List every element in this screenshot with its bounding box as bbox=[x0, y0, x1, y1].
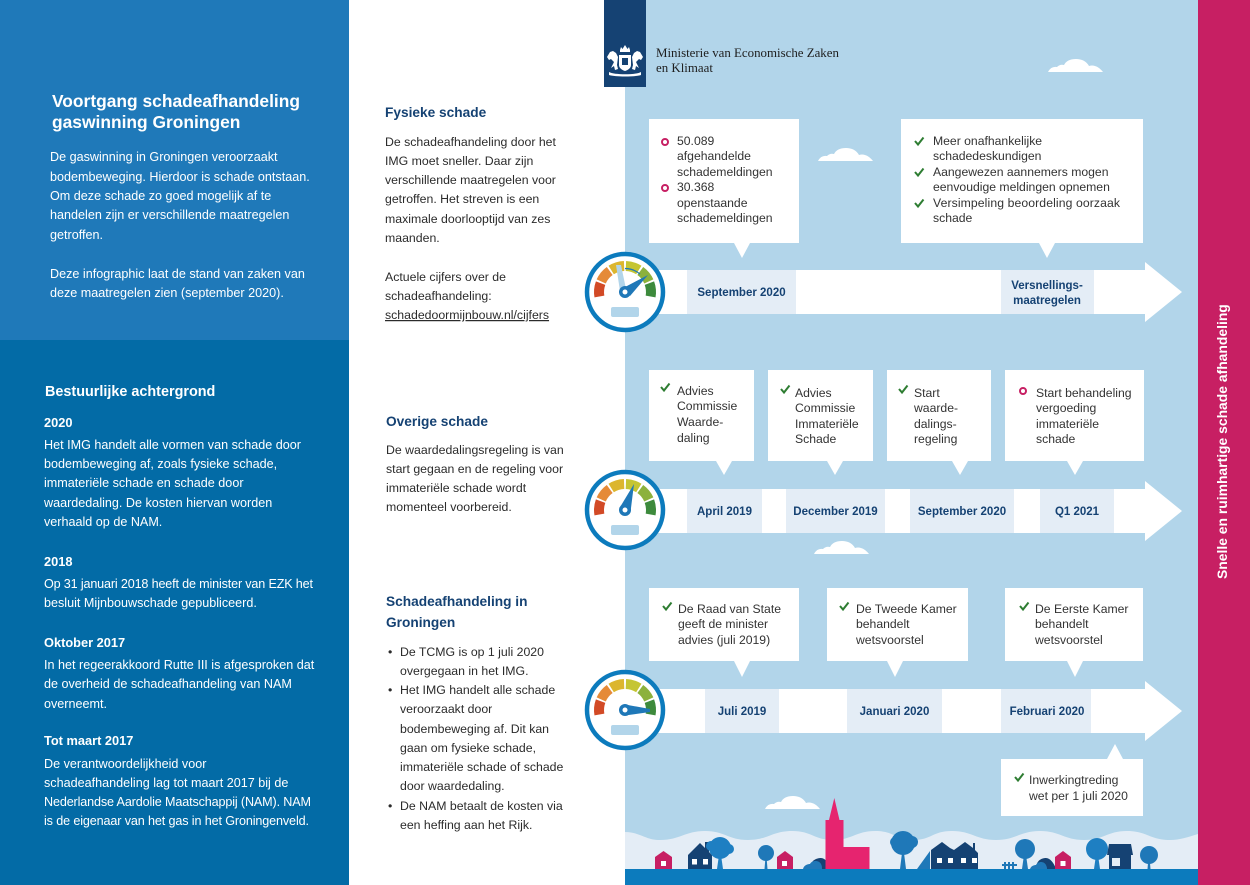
icon: bush bbox=[803, 858, 830, 869]
text block: oktober 2017 bbox=[44, 635, 315, 711]
date: september 2020: September 2020 bbox=[918, 506, 1006, 518]
icon: tree bbox=[758, 845, 774, 869]
text block: fysieke schade: getroffen. Het streven is een bbox=[385, 192, 539, 206]
callout: start waardedalingsregeling: waarde- bbox=[913, 401, 958, 415]
date: versnellingsmaatregelen: maatregelen bbox=[1013, 295, 1081, 307]
text block: fysieke schade: maanden. bbox=[385, 231, 440, 245]
callout: inwerkingtreding bbox=[1001, 744, 1143, 816]
callout: schademeldingen: schademeldingen bbox=[677, 211, 773, 225]
panel: timeline background bbox=[625, 0, 1198, 885]
heading: bestuurlijke achtergrond: Bestuurlijke achtergrond bbox=[45, 384, 215, 400]
text block: overige schade: momenteel voorbereid. bbox=[386, 500, 512, 514]
text block: schadeafhandeling in groningen: immateriële schade of schade bbox=[400, 760, 564, 774]
cloud bbox=[1048, 59, 1103, 72]
text block: schadeafhandeling in groningen: De TCMG is op 1 juli 2020 bbox=[400, 645, 544, 659]
text block: introduction: bodembeweging. Hierdoor is schade ontstaan. bbox=[50, 170, 310, 184]
icon: tree bbox=[1140, 846, 1158, 869]
text block: schadeafhandeling in groningen: veroorzaakt door bbox=[400, 702, 492, 716]
callout: schademeldingen: afgehandelde bbox=[677, 149, 751, 163]
date: q1 2021 bbox=[1040, 489, 1114, 533]
title bbox=[52, 91, 300, 132]
text: ministry name: Ministerie van Economische Zaken bbox=[656, 46, 839, 60]
callout: tweede kamer: wetsvoorstel bbox=[855, 633, 924, 647]
callout: advies commissie waardedaling: daling bbox=[677, 431, 710, 445]
date: januari 2020: Januari 2020 bbox=[860, 706, 929, 718]
callout: schademeldingen: 30.368 bbox=[677, 180, 714, 194]
callout: start waardedalingsregeling: dalings- bbox=[914, 417, 957, 431]
callout: advies commissie waardedaling: Commissie bbox=[677, 399, 737, 413]
callout: start behandeling vergoeding: Start behandeling bbox=[1036, 386, 1132, 400]
callout: start behandeling vergoeding: immateriële bbox=[1036, 417, 1099, 431]
text block: tot maart 2017: De verantwoordelijkheid voor bbox=[44, 757, 206, 771]
icon: ring bullet bbox=[662, 139, 668, 145]
text block: schadeafhandeling in groningen: door waardedaling. bbox=[400, 779, 505, 793]
text block: tot maart 2017: schadeafhandeling lag tot maart 2017 bij de bbox=[44, 776, 288, 790]
text block: schadeafhandeling in groningen: • bbox=[388, 799, 392, 813]
callout: versnellingsmaatregelen: Aangewezen aannemers mogen bbox=[933, 165, 1108, 179]
panel: side banner: Snelle en ruimhartige schade afhandeling bbox=[1214, 304, 1230, 579]
callout: start waardedalingsregeling: regeling bbox=[914, 432, 957, 446]
callout: versnellingsmaatregelen: schade bbox=[933, 211, 973, 225]
illustration: village landscape bbox=[625, 798, 1198, 885]
text block: schadeafhandeling in groningen: een heffing aan het Rijk. bbox=[400, 818, 532, 832]
callout: tweede kamer: De Tweede Kamer bbox=[856, 602, 957, 616]
callout: eerste kamer: wetsvoorstel bbox=[1034, 633, 1103, 647]
text block: fysieke schade bbox=[385, 105, 557, 322]
text block: overige schade: start gegaan en de regeling voor bbox=[386, 462, 563, 476]
callout: start waardedalingsregeling bbox=[887, 370, 991, 475]
text block: schadeafhandeling in groningen: • bbox=[388, 683, 392, 697]
callout: start behandeling vergoeding: schade bbox=[1036, 432, 1076, 446]
callout: advies commissie immateriele schade: Schade bbox=[795, 432, 837, 446]
gauge: schadeafhandeling in groningen bbox=[587, 672, 663, 748]
text block: 2020: waardedaling. De kosten hiervan worden bbox=[43, 496, 272, 510]
text block: fysieke schade: De schadeafhandeling door het bbox=[385, 135, 557, 149]
icon: tree bbox=[890, 831, 918, 869]
callout: schademeldingen: 50.089 bbox=[677, 134, 714, 148]
callout: eerste kamer bbox=[1005, 588, 1143, 677]
text block: overige schade: De waardedalingsregeling is van bbox=[386, 443, 564, 457]
callout: schademeldingen: schademeldingen bbox=[677, 165, 773, 179]
text block: oktober 2017: Oktober 2017 bbox=[44, 635, 125, 650]
callout: start behandeling vergoeding bbox=[1005, 370, 1144, 475]
text block: schadeafhandeling in groningen: bodembeweging af. Dit kan bbox=[400, 722, 549, 736]
text block: fysieke schade: schadeafhandeling: bbox=[385, 289, 492, 303]
text block: introduction: Deze infographic laat de stand van zaken van bbox=[50, 267, 305, 281]
text block: fysieke schade: IMG moet sneller. Daar zijn bbox=[385, 154, 533, 168]
text block: 2018: Op 31 januari 2018 heeft de minister van EZK het bbox=[44, 577, 314, 591]
callout: raad van state: geeft de minister bbox=[678, 617, 768, 631]
date: december 2019: December 2019 bbox=[793, 506, 878, 518]
date: juli 2019: Juli 2019 bbox=[718, 706, 766, 718]
gauge: fysieke schade bbox=[587, 254, 663, 330]
text block: 2020: verhaald op de NAM. bbox=[44, 515, 162, 529]
callout: eerste kamer: De Eerste Kamer bbox=[1035, 602, 1128, 616]
callout: raad van state: advies (juli 2019) bbox=[678, 633, 770, 647]
text block: schadeafhandeling in groningen: gaan om fysieke schade, bbox=[400, 741, 536, 755]
callout: raad van state: De Raad van State bbox=[678, 602, 781, 616]
icon: ring bullet bbox=[1020, 388, 1026, 394]
text block: schadeafhandeling in groningen: Schadeafhandeling in bbox=[386, 594, 527, 609]
text block: fysieke schade: Actuele cijfers over de bbox=[385, 270, 506, 284]
callout: tweede kamer: behandelt bbox=[856, 617, 910, 631]
text: ministry name bbox=[656, 46, 839, 75]
text block: oktober 2017: In het regeerakkoord Rutte III is afgesproken dat bbox=[44, 658, 315, 672]
icon: ring bullet bbox=[662, 185, 668, 191]
icon: check bbox=[781, 386, 790, 392]
icon: check bbox=[840, 602, 848, 610]
cloud bbox=[818, 148, 873, 161]
icon: tree bbox=[706, 837, 734, 869]
icon: navy house bbox=[688, 842, 712, 869]
panel: introduction bbox=[0, 0, 349, 340]
text block: 2018: 2018 bbox=[44, 554, 72, 569]
callout: advies commissie immateriele schade: Commissie bbox=[795, 401, 855, 415]
text block: fysieke schade: schadedoormijnbouw.nl/cijfers bbox=[385, 308, 549, 322]
text block: introduction: De gaswinning in Groningen veroorzaakt bbox=[50, 150, 278, 164]
icon: fence bbox=[1002, 862, 1017, 869]
arrow: timeline 3 bbox=[625, 681, 1182, 741]
callout: advies commissie immateriele schade bbox=[768, 370, 873, 475]
icon: farm with double roof bbox=[917, 842, 978, 869]
callout: versnellingsmaatregelen: eenvoudige meldingen opnemen bbox=[933, 180, 1110, 194]
icon: check bbox=[899, 386, 908, 392]
text block: schadeafhandeling in groningen bbox=[386, 594, 564, 832]
callout: tweede kamer bbox=[827, 588, 968, 677]
callout: advies commissie waardedaling: Advies bbox=[677, 384, 714, 398]
text block: overige schade: immateriële schade wordt bbox=[386, 481, 527, 495]
gauge: overige schade bbox=[587, 472, 663, 548]
text: ministry name: en Klimaat bbox=[656, 61, 713, 75]
callout: raad van state bbox=[649, 588, 799, 677]
logo: rijksoverheid bbox=[604, 0, 646, 87]
icon: red house bbox=[777, 851, 793, 869]
text block: oktober 2017: overneemt. bbox=[44, 697, 107, 711]
icon: bush bbox=[1030, 858, 1056, 869]
callout: versnellingsmaatregelen bbox=[901, 119, 1143, 258]
callout: inwerkingtreding: wet per 1 juli 2020 bbox=[1028, 789, 1128, 803]
callout: versnellingsmaatregelen: schadedeskundigen bbox=[933, 149, 1041, 163]
text block: schadeafhandeling in groningen: overgegaan in het IMG. bbox=[400, 664, 529, 678]
date: april 2019 bbox=[687, 489, 762, 533]
date: versnellingsmaatregelen bbox=[1001, 270, 1094, 314]
callout: advies commissie waardedaling bbox=[649, 370, 754, 475]
text block: tot maart 2017: Nederlandse Aardolie Maatschappij (NAM). NAM bbox=[44, 795, 311, 809]
panel: bestuurlijke achtergrond bbox=[0, 340, 349, 885]
text block: schadeafhandeling in groningen: • bbox=[388, 645, 392, 659]
icon: check bbox=[915, 138, 924, 144]
title: Voortgang schadeafhandeling bbox=[52, 91, 300, 111]
text block: 2020: Het IMG handelt alle vormen van schade door bbox=[44, 438, 301, 452]
text block: 2020: immateriële schade en schade door bbox=[44, 476, 244, 490]
text block: introduction bbox=[50, 150, 310, 300]
icon: navy house bbox=[1107, 844, 1133, 869]
date: q1 2021: Q1 2021 bbox=[1055, 506, 1100, 518]
icon: check bbox=[1015, 774, 1024, 780]
arrow: timeline 1 bbox=[625, 262, 1182, 322]
callout: advies commissie waardedaling: Waarde- bbox=[677, 415, 723, 429]
cloud bbox=[814, 541, 869, 554]
date: december 2019 bbox=[786, 489, 885, 533]
date: september 2020: September 2020 bbox=[697, 287, 786, 299]
callout: versnellingsmaatregelen: Versimpeling beoordeling oorzaak bbox=[933, 196, 1121, 210]
icon: check bbox=[661, 384, 670, 390]
text block: tot maart 2017: Tot maart 2017 bbox=[44, 733, 133, 748]
callout: start waardedalingsregeling: Start bbox=[914, 386, 940, 400]
icon: red house bbox=[1055, 851, 1071, 869]
date: februari 2020 bbox=[1001, 689, 1091, 733]
callout: advies commissie immateriele schade: Immateriële bbox=[795, 417, 859, 431]
text block: introduction: handelen zijn er verschillende maatregelen bbox=[50, 208, 289, 222]
text block: tot maart 2017: is de eigenaar van het gas in het Groningenveld. bbox=[44, 814, 309, 828]
text block: tot maart 2017 bbox=[44, 733, 311, 828]
date: juli 2019 bbox=[705, 689, 779, 733]
callout: advies commissie immateriele schade: Advies bbox=[795, 386, 832, 400]
callout: start behandeling vergoeding: vergoeding bbox=[1036, 401, 1096, 415]
arrow: timeline 2 bbox=[625, 481, 1182, 541]
text block: 2020 bbox=[43, 415, 301, 529]
text block: overige schade bbox=[386, 414, 564, 514]
text block: 2020: 2020 bbox=[44, 415, 72, 430]
text block: introduction: getroffen. bbox=[50, 228, 103, 242]
text block: schadeafhandeling in groningen: De NAM betaalt de kosten via bbox=[400, 799, 563, 813]
icon: check bbox=[663, 602, 672, 610]
text block: schadeafhandeling in groningen: Groningen bbox=[386, 615, 455, 630]
text block: fysieke schade: maximale doorlooptijd van zes bbox=[385, 212, 550, 226]
text block: schadeafhandeling in groningen: Het IMG handelt alle schade bbox=[400, 683, 555, 697]
text block: 2020: bodembeweging af, zoals fysieke schade, bbox=[44, 457, 277, 471]
panel: side banner bbox=[1198, 0, 1250, 885]
date: januari 2020 bbox=[847, 689, 942, 733]
icon: check bbox=[915, 168, 924, 176]
callout: inwerkingtreding: Inwerkingtreding bbox=[1029, 773, 1118, 787]
date: versnellingsmaatregelen: Versnellings- bbox=[1011, 280, 1083, 292]
text block: introduction: deze maatregelen zien (september 2020). bbox=[50, 286, 284, 300]
text block: fysieke schade: verschillende maatregelen voor bbox=[385, 173, 556, 187]
text block: 2018: besluit Mijnbouwschade gepubliceerd. bbox=[44, 596, 257, 610]
icon: tree bbox=[1086, 838, 1108, 869]
text block: introduction: Om deze schade zo goed mogelijk af te bbox=[50, 189, 271, 203]
callout: versnellingsmaatregelen: Meer onafhankelijke bbox=[933, 134, 1042, 148]
callout: eerste kamer: behandelt bbox=[1035, 617, 1089, 631]
title: gaswinning Groningen bbox=[52, 112, 240, 132]
date: september 2020 bbox=[687, 270, 796, 314]
text block: oktober 2017: de overheid de schadeafhandeling van NAM bbox=[44, 677, 292, 691]
text block: overige schade: Overige schade bbox=[386, 414, 488, 429]
icon: church bbox=[826, 798, 870, 869]
cloud bbox=[765, 796, 820, 809]
icon: tree bbox=[1015, 839, 1035, 869]
text block: 2018 bbox=[44, 554, 314, 610]
icon: red house bbox=[655, 851, 672, 869]
callout: schademeldingen: openstaande bbox=[677, 196, 748, 210]
date: februari 2020: Februari 2020 bbox=[1010, 706, 1084, 718]
icon: check bbox=[1020, 602, 1028, 610]
text block: fysieke schade: Fysieke schade bbox=[385, 105, 487, 120]
date: april 2019: April 2019 bbox=[697, 506, 752, 518]
icon: check bbox=[915, 200, 924, 206]
date: september 2020 bbox=[910, 489, 1014, 533]
callout: schademeldingen bbox=[649, 119, 799, 258]
